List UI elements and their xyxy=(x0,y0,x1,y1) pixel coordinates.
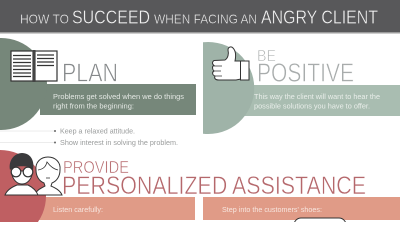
positive body text xyxy=(254,94,380,110)
positive body text: This way the client will want to hear the xyxy=(254,94,380,101)
positive heading xyxy=(257,48,354,88)
listen text: Listen carefully: xyxy=(53,207,103,214)
listen panel xyxy=(30,197,195,220)
icon: thumbs up xyxy=(212,47,249,80)
bullet list: Show interest in solving the problem. xyxy=(60,140,178,147)
speech bubble xyxy=(294,218,346,232)
plan body text xyxy=(53,94,185,110)
icon: notebook xyxy=(11,50,57,82)
panel: plan xyxy=(0,38,196,130)
icon: two people xyxy=(5,153,62,195)
step panel xyxy=(203,197,400,220)
positive heading: POSITIVE xyxy=(257,58,354,88)
positive body text: possible solutions you have to offer. xyxy=(254,104,370,110)
plan circle xyxy=(0,38,47,130)
man xyxy=(5,185,38,195)
title: WHEN FACING AN xyxy=(154,12,257,26)
plan heading: PLAN xyxy=(62,58,118,88)
bullet list xyxy=(0,128,178,147)
panel: personalized assistance xyxy=(0,150,400,240)
plan body text: Problems get solved when we do things xyxy=(53,94,185,101)
woman xyxy=(35,157,62,195)
assistance heading: PROVIDE xyxy=(63,157,129,177)
positive heading: BE xyxy=(257,48,276,65)
step text: Step into the customers' shoes: xyxy=(222,207,322,214)
bullet list: Keep a relaxed attitude. xyxy=(60,128,135,136)
positive circle xyxy=(203,42,254,134)
title xyxy=(20,8,378,28)
assistance circle xyxy=(0,150,46,240)
title: HOW TO xyxy=(20,12,69,26)
plan text panel xyxy=(40,84,196,115)
panel: be positive xyxy=(203,42,400,134)
assistance heading xyxy=(62,157,366,200)
title: SUCCEED xyxy=(72,8,150,28)
header band xyxy=(0,0,400,34)
title: ANGRY CLIENT xyxy=(261,8,378,28)
plan body text: right from the beginning: xyxy=(53,104,134,110)
positive text panel xyxy=(240,85,400,116)
